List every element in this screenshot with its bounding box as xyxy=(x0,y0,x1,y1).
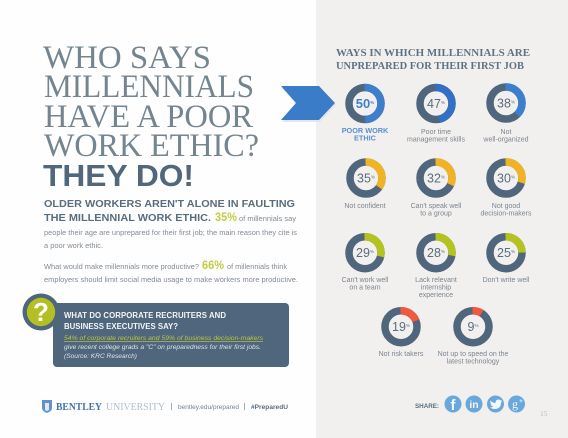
icon: question mark badge: ? xyxy=(33,297,49,327)
donut: 47% poor time management: % xyxy=(441,100,445,105)
donut: 25% don't write well xyxy=(483,237,530,284)
donut: 32% can't speak well xyxy=(411,162,462,218)
icon: question mark badge xyxy=(22,294,60,330)
donut: 28% lack relevant internship experience: 28 xyxy=(427,246,441,260)
text block: older workers: of millennials say xyxy=(239,214,296,223)
donut: 28% lack relevant internship experience: internship xyxy=(421,284,451,292)
donut: 32% can't speak well: 32 xyxy=(427,172,441,186)
donut: 32% can't speak well: % xyxy=(441,174,445,180)
donut: 30% not good decision-makers: % xyxy=(511,174,515,180)
title xyxy=(43,40,259,164)
donut: 35% not confident: 35 xyxy=(357,172,371,186)
heading: ways in which: WAYS IN WHICH MILLENNIALS ARE xyxy=(336,47,530,59)
share label: SHARE: xyxy=(415,403,439,410)
icon: twitter xyxy=(487,396,504,412)
donut: 35% not confident xyxy=(344,162,386,210)
donut: 50% poor work ethic: ETHIC xyxy=(354,134,377,142)
donut: 25% don't write well: Don't write well xyxy=(483,277,530,284)
callout: recruiters and executives: BUSINESS EXECUTIVES SAY? xyxy=(64,322,178,331)
title: HAVE A POOR xyxy=(44,99,253,135)
donut: 28% lack relevant internship experience: % xyxy=(441,249,445,254)
text block: older workers xyxy=(44,198,297,250)
callout: recruiters and executives: WHAT DO CORPORATE RECRUITERS AND xyxy=(64,311,226,320)
donut: 29% can't work well on a team: Can't work well xyxy=(342,277,389,284)
text block: older workers: a poor work ethic. xyxy=(44,241,103,250)
text block: productivity xyxy=(44,260,298,284)
callout: recruiters and executives: 54% of corporate recruiters and 59% of business decision-makers xyxy=(64,335,264,342)
text block: older workers: people their age are unprepared for their first job; the main reason they cite is xyxy=(44,228,297,237)
donut: 47% poor time management: Poor time xyxy=(421,129,451,136)
donut: 28% lack relevant internship experience: experience xyxy=(419,292,453,299)
donut: 9% not up to speed on technology xyxy=(438,311,509,366)
arrow xyxy=(281,86,336,122)
donut: 19% not risk takers: % xyxy=(406,323,410,328)
footer: logo wordmark: UNIVERSITY xyxy=(106,402,165,413)
icon: facebook xyxy=(444,396,462,414)
text block: productivity: What would make millennials more productive? xyxy=(44,262,199,271)
donut: 9% not up to speed on technology: % xyxy=(474,323,478,328)
donut: 19% not risk takers: Not risk takers xyxy=(379,351,424,358)
callout: recruiters and executives: (Source: KRC Research) xyxy=(64,353,137,360)
title: MILLENNIALS xyxy=(44,69,254,105)
donut: 29% can't work well on a team: 29 xyxy=(356,246,370,260)
callout: recruiters and executives: give recent college grads a "C" on preparedness for their first jobs. xyxy=(64,344,261,351)
donut: 30% not good decision-makers: 30 xyxy=(497,172,511,186)
title emphasis: THEY DO! xyxy=(43,158,194,193)
donut: 19% not risk takers xyxy=(379,311,424,358)
donut: 30% not good decision-makers: decision-makers xyxy=(481,210,532,218)
donut: 35% not confident: % xyxy=(371,174,375,180)
text block: older workers: 35% xyxy=(215,212,237,224)
heading: ways in which xyxy=(336,47,530,72)
donut: 38% not well-organized: Not xyxy=(501,129,511,136)
title: WORK ETHIC? xyxy=(44,128,259,164)
donut: 38% not well-organized: well-organized xyxy=(482,136,529,144)
text block: productivity: employers should limit social media usage to make workers more productive. xyxy=(44,275,298,284)
donut: 47% poor time management xyxy=(407,88,465,144)
donut: 38% not well-organized xyxy=(482,87,529,144)
icon: google plus: g xyxy=(512,397,518,411)
donut: 9% not up to speed on technology: Not up to speed on the xyxy=(438,351,509,358)
footer: links: #PreparedU xyxy=(251,404,288,411)
footer: logo wordmark xyxy=(56,402,165,413)
icon: google plus: + xyxy=(519,399,523,405)
donut: 29% can't work well on a team: % xyxy=(370,249,374,254)
donut: 38% not well-organized: 38 xyxy=(497,96,511,110)
donut: 47% poor time management: 47 xyxy=(427,97,441,111)
footer: links xyxy=(171,403,288,411)
icon: Bentley shield xyxy=(42,400,52,413)
text block: productivity: of millennials think xyxy=(227,262,287,271)
title: WHO SAYS xyxy=(43,40,211,76)
icon: google plus xyxy=(508,396,525,412)
callout: recruiters and executives xyxy=(53,303,289,367)
donut: 30% not good decision-makers xyxy=(481,162,532,218)
donut: 50% poor work ethic: % xyxy=(370,100,374,105)
donut: 25% don't write well: % xyxy=(511,249,515,254)
page number: 15 xyxy=(540,409,548,418)
donut: 32% can't speak well: to a group xyxy=(420,210,452,218)
donut: 35% not confident: Not confident xyxy=(344,203,386,210)
donut: 9% not up to speed on technology: latest technology xyxy=(447,358,500,366)
donut: 25% don't write well: 25 xyxy=(497,246,511,260)
icon: linkedin xyxy=(466,396,482,412)
icon: facebook: f xyxy=(450,397,456,414)
heading: ways in which: UNPREPARED FOR THEIR FIRST JOB xyxy=(336,60,525,72)
donut: 29% can't work well on a team: on a team xyxy=(349,284,381,292)
donut: 50% poor work ethic: 50 xyxy=(356,96,370,111)
icon: linkedin: in xyxy=(469,399,479,411)
donut: 28% lack relevant internship experience xyxy=(415,237,457,299)
donut: 28% lack relevant internship experience: Lack relevant xyxy=(415,277,457,284)
donut: 50% poor work ethic: POOR WORK xyxy=(342,126,389,135)
donut: 50% poor work ethic xyxy=(342,88,389,142)
text block: older workers: THE MILLENNIAL WORK ETHIC. xyxy=(44,212,211,224)
donut: 29% can't work well on a team xyxy=(342,237,389,292)
donut: 19% not risk takers: 19 xyxy=(392,320,406,334)
footer: logo wordmark: BENTLEY xyxy=(56,402,103,413)
footer: links: bentley.edu/prepared xyxy=(178,404,239,411)
donut: 30% not good decision-makers: Not good xyxy=(492,203,520,210)
donut: 32% can't speak well: Can't speak well xyxy=(411,203,462,210)
donut: 38% not well-organized: % xyxy=(511,100,515,104)
text block: older workers: OLDER WORKERS AREN'T ALONE IN FAULTING xyxy=(44,198,295,210)
text block: productivity: 66% xyxy=(202,260,224,272)
donut: 47% poor time management: management skills xyxy=(407,136,465,144)
donut: 9% not up to speed on technology: 9 xyxy=(468,320,474,334)
panel: right column background xyxy=(316,0,568,438)
